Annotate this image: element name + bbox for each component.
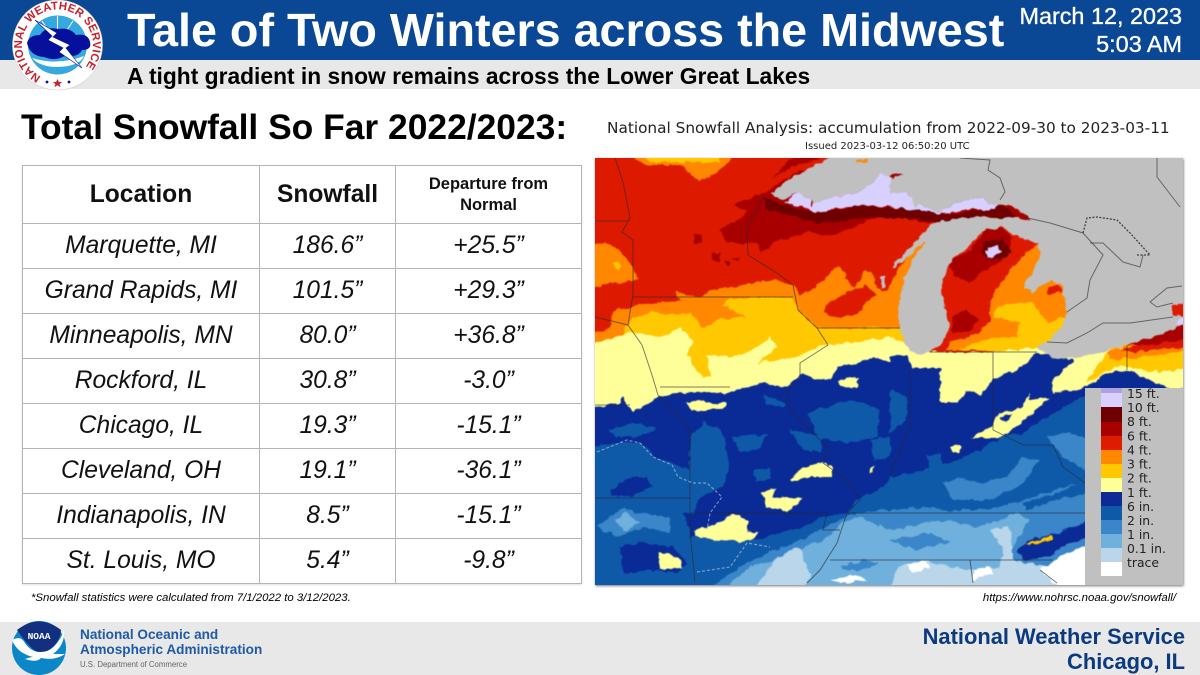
row: Chicago: [79, 412, 522, 439]
row: Indianapolis: -15.1”: [456, 502, 521, 529]
row: Minneapolis: +36.8”: [453, 322, 524, 349]
map: state and province borders: [595, 158, 1182, 583]
row: Cleveland: [61, 457, 522, 484]
row: Grand Rapids: [45, 277, 525, 304]
footer bar: [0, 622, 1200, 675]
NOAA department: U.S. Department of Commerce: [80, 660, 187, 669]
row: Grand Rapids: Grand Rapids, MI: [45, 277, 237, 304]
legend labels: 2 ft.: [1127, 470, 1152, 486]
legend labels: 6 in.: [1127, 499, 1154, 514]
row: Indianapolis: 8.5”: [306, 502, 349, 529]
title: Tale of Two Winters across the Midwest: [127, 4, 1004, 56]
row: Chicago: Chicago, IL: [79, 412, 203, 439]
map title: National Snowfall Analysis: accumulation from 2022-09-30 to 2023-03-11: [607, 119, 1170, 137]
row: Cleveland: Cleveland, OH: [61, 457, 221, 484]
legend color swatches: [1101, 388, 1122, 576]
table header row: Departure from: [429, 174, 548, 192]
row: Indianapolis: [56, 502, 522, 529]
legend labels: 3 ft.: [1127, 456, 1152, 472]
date and time: 5:03 AM: [1096, 31, 1182, 57]
row: Cleveland: 19.1”: [299, 457, 356, 484]
map: snowfall color field: [585, 150, 1200, 595]
row: Minneapolis: [49, 322, 525, 349]
legend labels: 4 ft.: [1127, 442, 1152, 458]
legend labels: 6 ft.: [1127, 428, 1152, 444]
row: St. Louis: St. Louis, MO: [66, 547, 215, 574]
row: Marquette: [65, 232, 525, 259]
row: Minneapolis: Minneapolis, MN: [49, 322, 233, 349]
table header row: [45, 174, 548, 574]
row: Rockford: [75, 367, 515, 394]
office name: Chicago, IL: [1067, 649, 1185, 674]
row: Cleveland: -36.1”: [456, 457, 521, 484]
row: St. Louis: [66, 547, 515, 574]
legend labels: 15 ft.: [1127, 386, 1160, 401]
office name: National Weather Service: [923, 624, 1185, 649]
row: Rockford: 30.8”: [299, 367, 356, 394]
NOAA name: Atmospheric Administration: [80, 642, 262, 657]
row: Indianapolis: Indianapolis, IN: [56, 502, 226, 529]
NOAA name: [80, 627, 262, 657]
row: Grand Rapids: +29.3”: [453, 277, 524, 304]
legend labels: 10 ft.: [1127, 400, 1160, 415]
date and time: March 12, 2023: [1019, 3, 1182, 29]
NOAA name: National Oceanic and: [80, 627, 218, 642]
snowfall table: [22, 165, 582, 584]
row: St. Louis: 5.4”: [306, 547, 349, 574]
legend labels: [1127, 386, 1166, 570]
icon: NOAA logo: NOAA: [28, 631, 51, 642]
row: Rockford: -3.0”: [463, 367, 514, 394]
row: St. Louis: -9.8”: [463, 547, 514, 574]
legend labels: 0.1 in.: [1127, 541, 1166, 556]
row: Chicago: -15.1”: [456, 412, 521, 439]
legend labels: trace: [1127, 555, 1159, 570]
table header row: Snowfall: [277, 180, 378, 208]
row: Rockford: Rockford, IL: [75, 367, 207, 394]
legend labels: 1 in.: [1127, 527, 1154, 542]
subtitle bar: [0, 60, 1200, 89]
row: Chicago: 19.3”: [299, 412, 356, 439]
snowfall map: [594, 157, 1186, 588]
table heading: Total Snowfall So Far 2022/2023:: [21, 107, 567, 147]
row: Marquette: 186.6”: [293, 232, 362, 259]
source url: https://www.nohrsc.noaa.gov/snowfall/: [983, 592, 1176, 604]
office name: [923, 624, 1185, 674]
table header row: Location: [90, 180, 192, 208]
legend labels: 2 in.: [1127, 513, 1154, 528]
subtitle: A tight gradient in snow remains across the Lower Great Lakes: [127, 63, 810, 89]
header bar: [0, 0, 1200, 60]
date and time: [1019, 3, 1182, 57]
icon: NOAA logo: [12, 621, 66, 675]
icon: National Weather Service logo: NATIONAL WEATHER SERVICE: [14, 2, 101, 83]
legend labels: 1 ft.: [1127, 485, 1152, 500]
map issued time: Issued 2023-03-12 06:50:20 UTC: [805, 141, 970, 152]
table header row: Normal: [460, 196, 517, 214]
map legend: [1085, 386, 1183, 585]
legend labels: 8 ft.: [1127, 414, 1152, 429]
row: Minneapolis: 80.0”: [299, 322, 356, 349]
footnote: *Snowfall statistics were calculated from 7/1/2022 to 3/12/2023.: [31, 592, 351, 604]
row: Marquette: +25.5”: [453, 232, 524, 259]
row: Grand Rapids: 101.5”: [293, 277, 362, 304]
row: Marquette: Marquette, MI: [65, 232, 217, 259]
